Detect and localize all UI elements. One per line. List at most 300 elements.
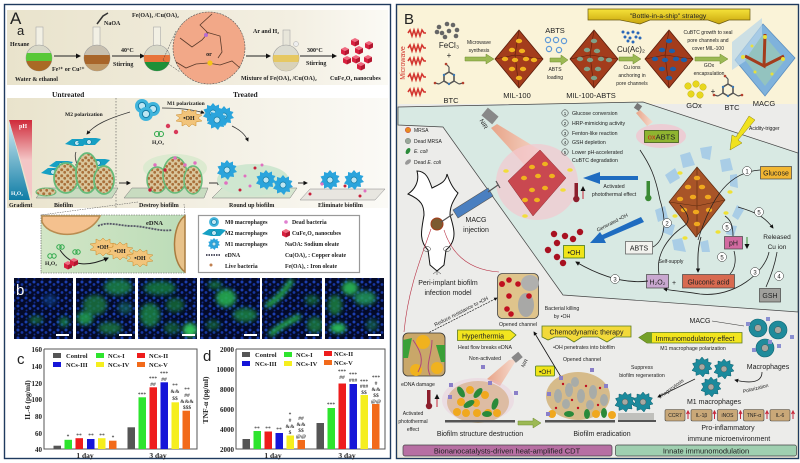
- burst OH 3: [127, 249, 153, 267]
- legend d: NCs-III: [255, 361, 277, 368]
- flask 3: [144, 27, 170, 72]
- significance marks: $$: [172, 395, 178, 402]
- text CuBTC growth: CuBTC growth to seal: [684, 30, 732, 36]
- icon: nanocube: [64, 258, 78, 270]
- gradient wedge pH: [9, 120, 32, 200]
- icon: dropper: [97, 13, 108, 24]
- biofilm destroy: [124, 154, 208, 198]
- legend text dead bacteria: Dead bacteria: [292, 220, 327, 226]
- red up arrows: [686, 411, 794, 419]
- x labels: 1 day: [264, 451, 282, 460]
- y ticks: 10000: [216, 366, 234, 374]
- strategy banner: [588, 9, 750, 24]
- significance marks: ***: [360, 379, 368, 385]
- icon: microwave waves: [408, 30, 426, 95]
- icon: FeCl3 dots: [435, 22, 459, 39]
- arrow acidity trigger: [730, 116, 755, 150]
- text hexane: Hexane: [10, 42, 30, 48]
- legend c: NCs-V: [149, 362, 168, 369]
- red callout curves: [404, 229, 499, 332]
- legend bacteria: [404, 127, 442, 166]
- significance marks: #: [289, 418, 292, 424]
- micrograph 2: [76, 278, 135, 339]
- text M2 polarization: M2 polarization: [65, 112, 103, 118]
- M0 cell: [135, 99, 160, 121]
- text BTC: BTC: [724, 103, 740, 112]
- circled 5: [722, 222, 732, 232]
- MACG particles: [746, 317, 794, 352]
- significance marks: ***: [149, 376, 157, 382]
- zoomed circle: [163, 12, 245, 84]
- x labels: 3 day: [149, 451, 167, 460]
- text suppress: Suppress: [631, 365, 653, 371]
- significance marks: ###: [360, 384, 368, 390]
- bars 1 day: [242, 431, 305, 449]
- legend d: NCs-V: [334, 360, 353, 367]
- text photothermal: photothermal: [398, 419, 428, 425]
- text 40C: 40°C: [121, 47, 134, 54]
- legend c: Control: [66, 353, 88, 360]
- blue arrow: [583, 172, 638, 184]
- eDNA damage inset: [403, 333, 445, 376]
- circled 5: 5: [757, 210, 761, 216]
- OH box: •OH: [568, 250, 580, 257]
- panel B: grey region: [398, 104, 797, 457]
- text ABTS: ABTS: [545, 26, 565, 35]
- circled 2: 2: [665, 222, 669, 228]
- H2O2 box: H₂O₂: [650, 280, 666, 286]
- NIR emitter 1: NIR: [478, 119, 488, 131]
- label B: B: [404, 11, 414, 28]
- MACG particle: [732, 18, 795, 96]
- arrow: [119, 182, 130, 184]
- micrograph 5: [262, 278, 323, 339]
- text MACG injection: MACG: [466, 217, 486, 224]
- text water and ethanol: Water & ethanol: [15, 77, 58, 83]
- micrographs b: [14, 278, 384, 339]
- text CuBTC growth: pore channels and: [687, 38, 729, 44]
- panel B: central reaction network: [404, 103, 792, 302]
- bottom pill: CDT: Bionanocatalysts-driven heat-amplified CDT: [434, 446, 581, 456]
- legend bacteria: E. coli: [414, 149, 429, 155]
- text CuAc2: Cu(Ac)₂: [617, 45, 645, 54]
- text bacterial killing: Bacterial killing: [545, 306, 579, 312]
- list of reactions: 1: [564, 111, 567, 116]
- text activated photothermal effect: photothermal effect: [592, 192, 637, 198]
- y ticks: 6000: [220, 406, 234, 414]
- arrow: [232, 126, 248, 141]
- significance marks: **: [276, 427, 282, 433]
- arrow: [75, 152, 78, 167]
- legend c: NCs-I: [108, 353, 125, 360]
- legend text M2: M2 macrophages: [225, 231, 268, 237]
- OH box: [564, 246, 584, 258]
- H2O2 molecules: [48, 245, 80, 258]
- text reduce resistance: Reduce resistance to •OH: [434, 296, 490, 328]
- text FeCl3: FeCl₃: [439, 41, 459, 50]
- text effect: effect: [407, 427, 420, 433]
- text 300C: 300°C: [307, 47, 323, 54]
- text destroy biofilm: Destroy biofilm: [139, 203, 179, 209]
- arrow: [550, 55, 568, 65]
- significance marks: &&: [371, 387, 381, 393]
- text metal ions: Fe³⁺ or Cu²⁺: [52, 66, 84, 73]
- text eDNA: eDNA: [146, 220, 163, 227]
- text pro-inflammatory: Pro-inflammatory: [701, 425, 755, 432]
- significance marks: $$: [361, 389, 367, 396]
- arrow: [619, 54, 641, 64]
- significance marks: $$$: [183, 404, 191, 411]
- y ticks: 2000: [220, 346, 234, 354]
- arrow: [298, 182, 307, 184]
- mouse ears and nose: [424, 246, 450, 275]
- y ticks: 140: [32, 363, 42, 371]
- legend text M1: M1 macrophages: [225, 242, 268, 248]
- MOF MIL-100: [495, 30, 543, 88]
- text Cu ions: Cu ions: [624, 65, 641, 71]
- chemodynamic label: Chemodynamic therapy: [550, 330, 624, 336]
- panel a: synthesis strip: [7, 9, 388, 85]
- bars 1 day: [54, 438, 116, 449]
- text infection model: infection model: [424, 290, 472, 297]
- connector MACG: [712, 321, 744, 326]
- syringe: [441, 181, 500, 222]
- icon: BTC molecule: [434, 63, 464, 85]
- text microwave: Microwave: [400, 46, 407, 80]
- legend d: NCs-II: [334, 351, 354, 358]
- panel a: biofilm scheme: [7, 98, 388, 209]
- bottom pill: innate: Innate immunomodulation: [663, 446, 749, 456]
- text eDNA damage: eDNA damage: [401, 382, 435, 388]
- central MOF particle: [669, 167, 733, 240]
- significance marks: &&&: [180, 399, 194, 405]
- text plus: +: [447, 51, 452, 60]
- oxABTS box: oxABTS: [648, 132, 675, 142]
- text M1 macrophage polarization: M1 macrophage polarization: [660, 346, 726, 352]
- icon: nanocubes: [341, 38, 373, 70]
- text MIL-100: MIL-100: [503, 91, 531, 100]
- legend text CuOA: Cu(OA)₂ : Copper oleate: [285, 252, 346, 259]
- text BTC: BTC: [444, 96, 459, 105]
- arrow heating: [300, 55, 336, 57]
- panel B frame: [396, 4, 798, 458]
- significance marks: **: [76, 433, 82, 439]
- icon: up arrow: [436, 395, 438, 407]
- text mixture: Mixture of Fe(OA)₃ /Cu(OA)₂: [241, 75, 317, 82]
- inset: eDNA: [41, 202, 185, 273]
- hyperthermia label: [458, 330, 516, 340]
- text stirring: Stirring: [113, 62, 133, 68]
- legend d: NCs-I: [296, 352, 313, 359]
- list of reactions: Fenton-like reaction: [572, 131, 618, 137]
- green arrow: [518, 418, 541, 428]
- burst OH 2: •OH: [114, 249, 126, 255]
- legend a: [198, 216, 360, 272]
- arrow to oxABTS: [640, 150, 664, 247]
- legend item eDNA: [206, 254, 220, 256]
- circled 4: [774, 272, 784, 280]
- text microwave synthesis: Microwave: [467, 40, 491, 46]
- arrow to inset: [534, 332, 570, 392]
- significance marks: **: [254, 426, 260, 432]
- biofilm untreated: [36, 153, 118, 198]
- dashed arrow: [424, 298, 497, 335]
- burst OH 2: [107, 242, 133, 260]
- arrow to OH: [576, 262, 648, 282]
- circled 4: 4: [777, 274, 781, 280]
- M1 macrophages spiky: [692, 357, 734, 397]
- significance marks: *: [67, 434, 70, 440]
- text M1 macrophages: M1 macrophages: [687, 399, 742, 406]
- arrow: [465, 54, 494, 64]
- significance marks: &&: [285, 424, 295, 430]
- legend c: NCs-II: [149, 353, 169, 360]
- text H2O2: H₂O₂: [11, 191, 23, 197]
- significance marks: ***: [160, 371, 168, 377]
- text gradient: Gradient: [9, 203, 32, 209]
- text biofilm regeneration: biofilm regeneration: [619, 373, 665, 379]
- arrow to released Cu: [738, 207, 773, 228]
- H2O2 molecule: [154, 124, 178, 136]
- text M1 polarization: M1 polarization: [167, 101, 205, 107]
- text non-activated: Non-activated: [469, 356, 501, 362]
- y ticks: 160: [32, 346, 42, 354]
- text H2O2: H₂O₂: [152, 140, 164, 146]
- text activated photothermal effect: Activated: [603, 184, 625, 190]
- text plus: +: [711, 87, 716, 96]
- text stirring: Stirring: [306, 61, 326, 67]
- arrow stirring: [112, 55, 144, 57]
- legend item M2: [202, 229, 226, 236]
- flask 4: [273, 30, 299, 72]
- list of reactions: HRP-mimicking activity: [572, 121, 625, 127]
- significance marks: @@: [371, 399, 381, 405]
- icon: red thermometer: [573, 183, 580, 202]
- legend bacteria: Dead E. coli: [414, 160, 442, 166]
- text MIL-100-ABTS: MIL-100-ABTS: [566, 91, 616, 100]
- panel A frame: [4, 4, 390, 458]
- blue fragments: [655, 146, 744, 252]
- red dots: [545, 229, 583, 266]
- circled 5: [754, 208, 764, 216]
- legend c: NCs-IV: [108, 362, 130, 369]
- list of reactions: GSH depletion: [572, 140, 606, 146]
- hyperthermia label: Hyperthermia: [462, 334, 504, 340]
- arrow M2: [87, 112, 130, 134]
- heading treated: Treated: [233, 90, 259, 99]
- significance marks: $$: [298, 427, 304, 434]
- legend d: Control: [255, 352, 277, 359]
- text nanocubes: CuFe₂O₄ nanocubes: [330, 76, 381, 82]
- arrows copper reactions: [664, 252, 777, 294]
- NIR emitter 1: [478, 108, 548, 172]
- significance marks: ###: [349, 378, 357, 384]
- circled 5: 5: [725, 226, 729, 232]
- y ticks: 4000: [220, 426, 234, 434]
- icon: BTC molecule: [713, 75, 743, 97]
- OH box: [536, 366, 554, 376]
- cytokine boxes: IL-6: [776, 413, 785, 419]
- immunomodulatory label: Immunomodulatory effect: [656, 336, 734, 343]
- y axis title: TNF-α (pg/ml): [201, 376, 210, 423]
- cytokine boxes: CCR7: [668, 413, 682, 419]
- text MACG: MACG: [753, 99, 775, 108]
- icon: green thermometer: [645, 181, 652, 201]
- circled 3: 3: [613, 278, 617, 284]
- glucose box: [760, 166, 792, 179]
- text MACG injection: injection: [463, 227, 489, 234]
- list of reactions: Glucose conversion: [572, 111, 618, 117]
- x labels: [76, 451, 167, 460]
- arrow catalysis: [60, 250, 108, 264]
- significance marks: *: [289, 412, 292, 418]
- significance marks: ##: [339, 375, 345, 381]
- significance marks: #: [375, 381, 378, 387]
- text pore channels: pore channels: [616, 81, 648, 87]
- inset opened channel: [498, 274, 539, 318]
- y ticks: 40: [35, 446, 42, 454]
- significance marks: &&: [170, 389, 180, 395]
- text OH penetrates: •OH penetrates into biofilm: [553, 345, 615, 351]
- list of reactions: 2: [564, 121, 567, 126]
- M1 macrophage cluster: [203, 103, 234, 130]
- text opened channel: Opened channel: [499, 322, 537, 328]
- pH box: pH: [729, 240, 738, 248]
- significance marks: ***: [372, 375, 380, 381]
- text opened channel: Opened channel: [563, 357, 601, 363]
- y ticks: 80: [35, 413, 42, 421]
- y ticks: 100: [32, 396, 42, 404]
- significance marks: $: [289, 429, 292, 436]
- text immune microenvironment: immune microenvironment: [688, 436, 770, 443]
- x labels: 1 day: [76, 451, 94, 460]
- arrow: [209, 182, 221, 184]
- significance marks: *: [112, 435, 115, 441]
- circled 5: 5: [720, 256, 724, 262]
- panel B: lower right immunomodulation: [615, 317, 794, 443]
- text heat flow: Heat flow breaks eDNA: [458, 345, 512, 351]
- significance marks: ***: [138, 392, 146, 398]
- chart c: IL-6: [17, 346, 197, 460]
- list of reactions: Lower pH-accelerated: [572, 150, 623, 156]
- text anchoring: anchoring in: [618, 73, 646, 79]
- bottom pill: CDT: [403, 445, 612, 456]
- legend d: NCs-IV: [296, 361, 318, 368]
- significance marks: **: [99, 433, 105, 439]
- text plus: +: [672, 280, 676, 287]
- oxABTS box: [636, 124, 686, 148]
- circled 3: [610, 274, 620, 284]
- legend c: NCs-III: [66, 362, 88, 369]
- biofilm eliminate: [300, 170, 385, 200]
- NIR emitter: [487, 352, 530, 386]
- burst OH 1: •OH: [97, 245, 109, 251]
- text generated OH: Generated •OH: [596, 212, 630, 234]
- text pH: pH: [19, 124, 27, 130]
- arrow: [246, 55, 270, 57]
- significance marks: &&: [296, 422, 306, 428]
- x labels: [264, 451, 356, 460]
- legend item dead bacteria: [284, 220, 288, 224]
- legend item M0: [209, 217, 219, 227]
- icon: red thermometer: [426, 390, 432, 409]
- scale bars: [56, 334, 381, 336]
- GSH box: [760, 288, 780, 302]
- legend d: [242, 351, 354, 368]
- burst OH 3: •OH: [134, 256, 146, 262]
- legend item live bacteria: [210, 264, 212, 266]
- text GOx encapsulation: GOx: [704, 63, 715, 69]
- significance marks: ***: [349, 372, 357, 378]
- significance marks: $$: [373, 392, 379, 399]
- zoomed circle: or: [206, 52, 212, 58]
- NIR emitter 2: [634, 103, 653, 126]
- bottom pill: innate: [616, 445, 796, 456]
- significance marks: [67, 371, 194, 441]
- text peri-implant: Peri-implant biofilm: [418, 280, 478, 287]
- H2O2 box: [646, 274, 668, 288]
- circled 2: [662, 218, 672, 228]
- flask 2: [84, 27, 110, 72]
- text biofilm structure destruction: Biofilm structure destruction: [437, 431, 523, 438]
- text released Cu ion: Released: [763, 234, 791, 241]
- photothermal particle: [496, 144, 578, 220]
- chart d: TNF-alpha: [201, 346, 385, 460]
- bars 3 day: [128, 382, 190, 449]
- text acidity trigger: Acidity-trigger: [749, 126, 780, 132]
- significance marks: **: [172, 383, 178, 389]
- list of reactions: [562, 110, 625, 164]
- cytokine boxes: TNF-α: [747, 413, 761, 419]
- legend c: [53, 353, 169, 369]
- mouse model: [404, 171, 579, 335]
- text macrophages: Macrophages: [747, 364, 790, 371]
- cytokine boxes: IL-1β: [696, 413, 707, 419]
- GSH box: GSH: [762, 293, 778, 300]
- text biofilm eradication: Biofilm eradication: [573, 431, 631, 438]
- label c: c: [17, 351, 25, 368]
- icon: GOx dots: [685, 81, 706, 98]
- mouse body: [408, 171, 458, 271]
- M2 macrophages: [41, 138, 110, 175]
- strategy banner: "Bottle-in-a-ship" strategy: [630, 13, 707, 20]
- text eliminate biofilm: Eliminate biofilm: [318, 203, 363, 209]
- arrow: [54, 55, 80, 57]
- arrow phagocytosis: [658, 379, 695, 397]
- y ticks: [32, 346, 42, 454]
- legend bacteria: Dead MRSA: [414, 139, 442, 145]
- legend text NaOA: NaOA: Sodium oleate: [285, 242, 340, 248]
- y axis title: IL-6 (pg/ml): [23, 380, 32, 420]
- macrophages: [749, 319, 787, 357]
- micrograph 4: [200, 278, 260, 339]
- MOF MIL-100-ABTS: [570, 30, 618, 88]
- glucose box: Glucose: [763, 170, 789, 178]
- flask 1: [26, 27, 52, 72]
- list of reactions: CuBTC degradation: [572, 158, 618, 164]
- eDNA strand: [98, 224, 172, 230]
- burst OH: [176, 109, 202, 127]
- arrow to gluconic: [698, 237, 701, 272]
- arrow polarization: [735, 372, 762, 382]
- circled 1: 1: [745, 170, 749, 176]
- text microwave synthesis: synthesis: [469, 48, 490, 54]
- pH box: [724, 236, 742, 249]
- gluconic acid box: [682, 274, 734, 288]
- burst OH: •OH: [183, 116, 195, 122]
- significance marks: **: [184, 387, 190, 393]
- text by OH: by •OH: [554, 314, 571, 320]
